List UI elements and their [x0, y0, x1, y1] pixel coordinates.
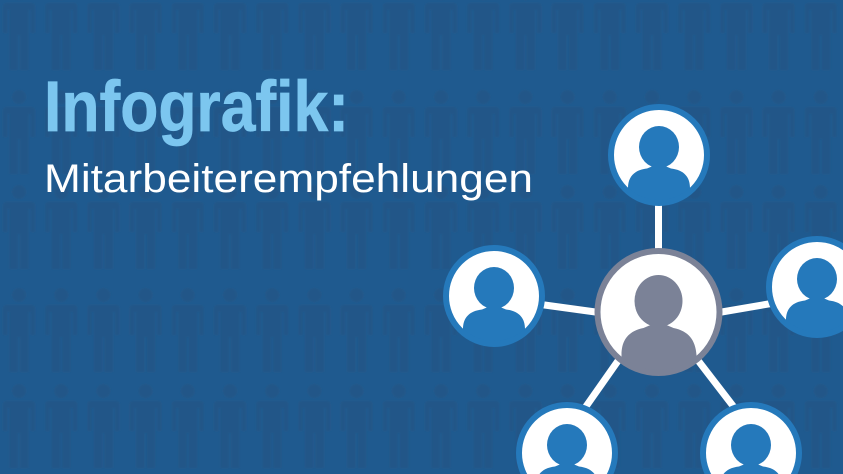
- title: Infografik:: [44, 68, 349, 147]
- network connectors: [530, 195, 780, 415]
- icon: top person: [611, 107, 707, 205]
- icon: bottom-left person: [519, 405, 615, 474]
- subtitle: Mitarbeiterempfehlungen: [44, 157, 533, 201]
- icon: central person: [598, 251, 720, 377]
- icon: bottom-right person: [703, 405, 799, 474]
- icon: right person: [769, 239, 843, 337]
- icon: left person: [446, 248, 542, 346]
